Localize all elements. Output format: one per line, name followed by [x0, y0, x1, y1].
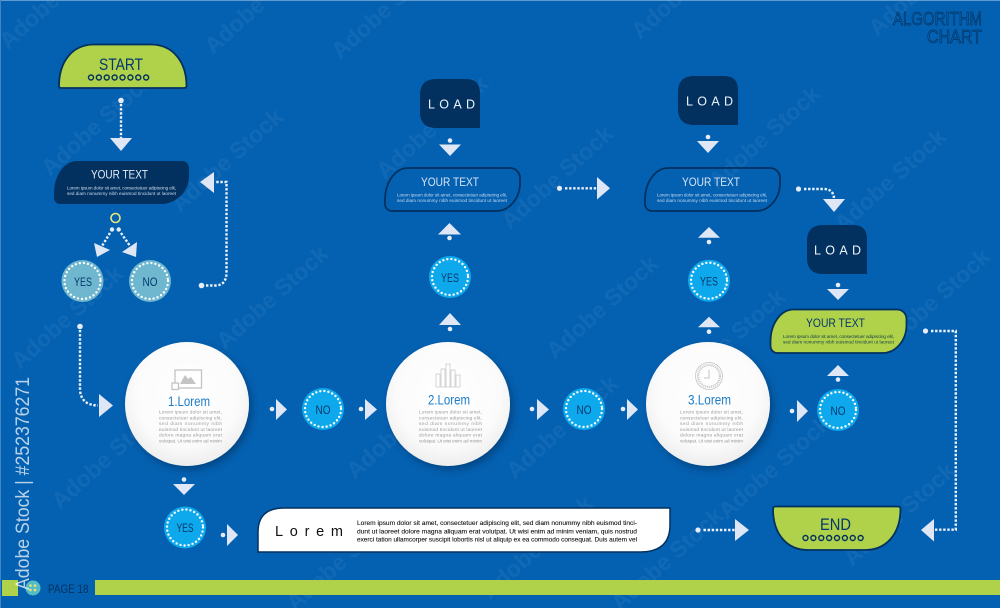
step circle two: euismod tincidunt ut laoreet [419, 427, 483, 433]
icon: clock [696, 362, 722, 390]
decision: no three [817, 389, 859, 431]
step circle two: Lorem ipsum dolor sit amet, [419, 410, 482, 416]
text box: outlined your text two [645, 168, 780, 211]
arrow: lorem box to end [695, 519, 749, 541]
step circle one: dolore magna aliquam erat [159, 433, 223, 439]
decision: no one [302, 388, 344, 430]
decision: yes one [429, 256, 471, 298]
text box: outlined your text two: sed diam nonummy nibh euismod tincidunt ut laoreet [657, 198, 768, 203]
footer bar [2, 580, 1000, 596]
icon: bar chart [436, 364, 460, 387]
text box: dark your text [54, 161, 189, 204]
arrow: yes to lorem box [221, 524, 238, 546]
decision: no one: NO [316, 403, 330, 417]
infographic canvas: Adobe Stock [501, 370, 623, 484]
load box two: LOAD [686, 94, 733, 108]
step circle three: consectetuer adipiscing elit, [680, 415, 743, 421]
arrow: circle two up to yes [439, 313, 461, 331]
start terminator [59, 44, 186, 88]
infographic canvas: Adobe Stock [476, 490, 598, 604]
arrow: circle three to no [790, 400, 808, 422]
decision: no two [563, 388, 605, 430]
step circle one: consectetuer adipiscing elit, [159, 415, 222, 421]
start terminator: START [99, 56, 143, 74]
text box: outlined your text two: Lorem ipsum dolor sit amet, consectetuer adipiscing elit, [657, 192, 767, 198]
arrow: loop back [199, 172, 226, 288]
arrow: circle one to no [270, 399, 287, 420]
infographic canvas: Adobe Stock [873, 243, 995, 357]
lorem text bar: Lorem ipsum dolor sit amet, consectetuer adipiscing elit, sed diam nonummy nibh euismod tinci- [357, 520, 637, 527]
text box: dark your text: sed diam nonummy nibh euismod tincidunt ut laoreet [67, 191, 177, 196]
lorem text bar [258, 508, 670, 552]
text box: dark your text: YOUR TEXT [91, 168, 149, 182]
arrow: start to text [110, 98, 132, 151]
text box: outlined your text one [385, 168, 520, 211]
arrow: no to circle two [359, 399, 377, 420]
title: algorithm chart: CHART [927, 27, 982, 47]
decision: yes three: YES [176, 521, 194, 535]
end terminator: END [820, 516, 851, 534]
decision: yes one: YES [441, 271, 459, 285]
title: algorithm chart [893, 9, 982, 47]
infographic canvas: Adobe Stock [341, 370, 463, 484]
infographic canvas: Adobe Stock [713, 410, 835, 524]
step circle three: sed diam nonummy nibh [680, 421, 743, 427]
icon: picture [172, 370, 202, 390]
lorem text bar: Lorem [275, 524, 343, 540]
infographic canvas: Adobe Stock [829, 123, 951, 237]
arrow: load one down [439, 138, 461, 156]
infographic canvas: Adobe Stock [541, 250, 663, 364]
title: algorithm chart: ALGORITHM [893, 9, 982, 29]
step circle two: consectetuer adipiscing elit, [419, 415, 482, 421]
arrow: load two down [697, 135, 719, 153]
step circle three [646, 342, 770, 466]
text box: green your text: Lorem ipsum dolor sit amet, consectetuer adipiscing elit, [783, 334, 894, 339]
decision: yes two [688, 260, 730, 302]
text box: outlined your text one: YOUR TEXT [421, 175, 480, 189]
infographic canvas: Adobe Stock [211, 240, 333, 354]
arrow: green text to end [921, 328, 956, 542]
decision: no three: NO [830, 404, 846, 418]
infographic canvas: Adobe Stock [36, 67, 158, 181]
infographic canvas: Adobe Stock [838, 457, 960, 571]
step circle one: volutpat. Ut wisi enim ad minim [159, 438, 222, 444]
arrow: text one to text two [557, 177, 610, 200]
step circle two [386, 342, 510, 466]
text box: green your text: YOUR TEXT [806, 316, 866, 330]
text box: dark your text: Lorem ipsum dolor sit amet, consectetuer adipiscing elit, [67, 186, 176, 190]
step circle three: 3.Lorem [688, 392, 731, 408]
decision: no two: NO [576, 403, 592, 417]
step circle one: Lorem ipsum dolor sit amet, [159, 410, 222, 416]
step circle two: volutpat. Ut wisi enim ad minim [419, 438, 482, 444]
step circle three: dolore magna aliquam erat [680, 433, 744, 439]
text box: green your text [770, 310, 906, 353]
arrow: circle one down to yes [173, 477, 195, 495]
step circle two: sed diam nonummy nibh [419, 421, 482, 427]
step circle one: sed diam nonummy nibh [159, 421, 222, 427]
load box three: LOAD [814, 244, 861, 258]
end terminator [773, 506, 900, 550]
step circle three: Lorem ipsum dolor sit amet, [680, 410, 743, 416]
lorem text bar: exerci tation ullamcorper suscipit lobortis nisl ut aliquip ex ea commodo consequat. Duis autem vel [357, 537, 637, 544]
decision fork arrows [94, 214, 137, 257]
infographic canvas: Adobe Stock [668, 283, 790, 397]
decision: yes three [164, 506, 206, 548]
step circle one: 1.Lorem [168, 393, 210, 409]
step circle one: euismod tincidunt ut laoreet [159, 427, 223, 433]
arrow: circle two to no [530, 399, 549, 420]
arrow: yes two up to text [698, 227, 720, 244]
infographic canvas: Adobe Stock [46, 400, 168, 514]
text box: outlined your text one: sed diam nonummy nibh euismod tincidunt ut laoreet [397, 198, 508, 203]
arrow: text two to load three [796, 186, 845, 212]
footer bar: PAGE 18 [48, 584, 88, 596]
arrow: yes one up to text [438, 223, 461, 240]
step circle three: volutpat. Ut wisi enim ad minim [680, 438, 743, 444]
infographic canvas: Adobe Stock [371, 70, 493, 184]
infographic canvas: Adobe Stock [496, 120, 618, 234]
arrow: no to circle three [621, 399, 638, 420]
infographic canvas: Adobe Stock [6, 260, 128, 374]
load box three [807, 225, 867, 274]
load box one: LOAD [428, 98, 475, 112]
decision: yes [62, 260, 104, 302]
step circle two: 2.Lorem [428, 392, 470, 408]
text box: green your text: sed diam nonummy nibh euismod tincidunt ut laoreet [783, 340, 895, 344]
step circle one [125, 342, 249, 466]
text box: outlined your text two: YOUR TEXT [682, 175, 741, 189]
arrow: load three down [827, 283, 849, 300]
text box: outlined your text one: Lorem ipsum dolor sit amet, consectetuer adipiscing elit, [397, 192, 507, 198]
vertical stock id: Adobe Stock | #252376271 [13, 377, 34, 590]
lorem text bar: dunt ut laoreet dolore magna aliquam erat volutpat. Ut wisi enim ad minim veniam, quis nostrud [357, 528, 638, 535]
decision: yes: YES [74, 275, 92, 289]
decision: no [129, 260, 171, 302]
arrow: no to circle one [77, 324, 113, 417]
infographic canvas: Adobe Stock [703, 80, 825, 194]
infographic canvas: Adobe Stock [166, 103, 288, 217]
step circle three: euismod tincidunt ut laoreet [680, 427, 744, 433]
step circle two: dolore magna aliquam erat [419, 433, 483, 439]
decision: no: NO [142, 275, 158, 289]
load box two [678, 76, 738, 125]
arrow: circle three up to yes [698, 317, 720, 334]
load box one [420, 79, 480, 128]
arrow: no three up [827, 365, 849, 382]
decision: yes two: YES [700, 275, 718, 289]
